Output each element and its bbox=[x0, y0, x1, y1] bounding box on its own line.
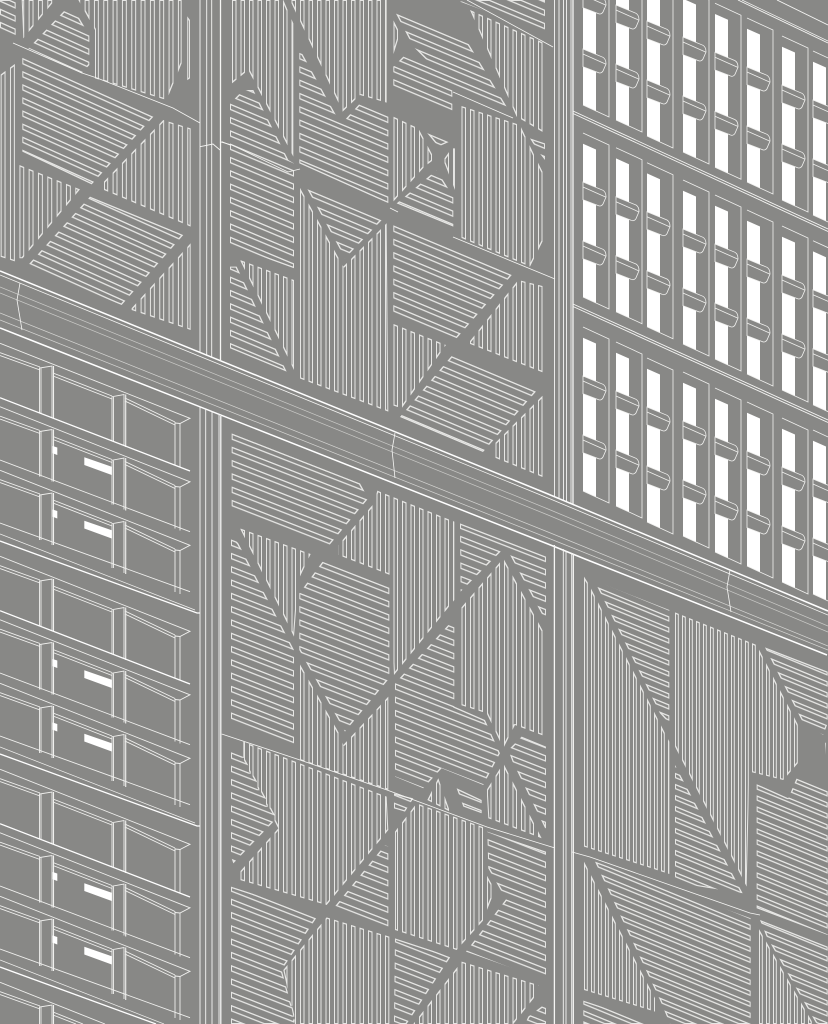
panel: lower centre hatched cladding bbox=[225, 420, 555, 1024]
panel: lower left balcony facade bbox=[0, 343, 200, 1024]
horizontal beam bbox=[0, 271, 828, 655]
vertical gutter left bbox=[200, 0, 230, 1024]
panel: upper centre hatched cladding bbox=[225, 0, 555, 500]
panel: upper right window grid bbox=[573, 0, 828, 606]
window row 1 bbox=[583, 0, 828, 227]
panel: upper left hatched cladding bbox=[0, 0, 191, 330]
window row 2 bbox=[583, 133, 828, 417]
panel: lower right hatched cladding bbox=[580, 560, 828, 1024]
window row dividers bbox=[573, 0, 828, 422]
window row 3 bbox=[583, 327, 828, 606]
vertical gutter right bbox=[554, 0, 573, 1024]
